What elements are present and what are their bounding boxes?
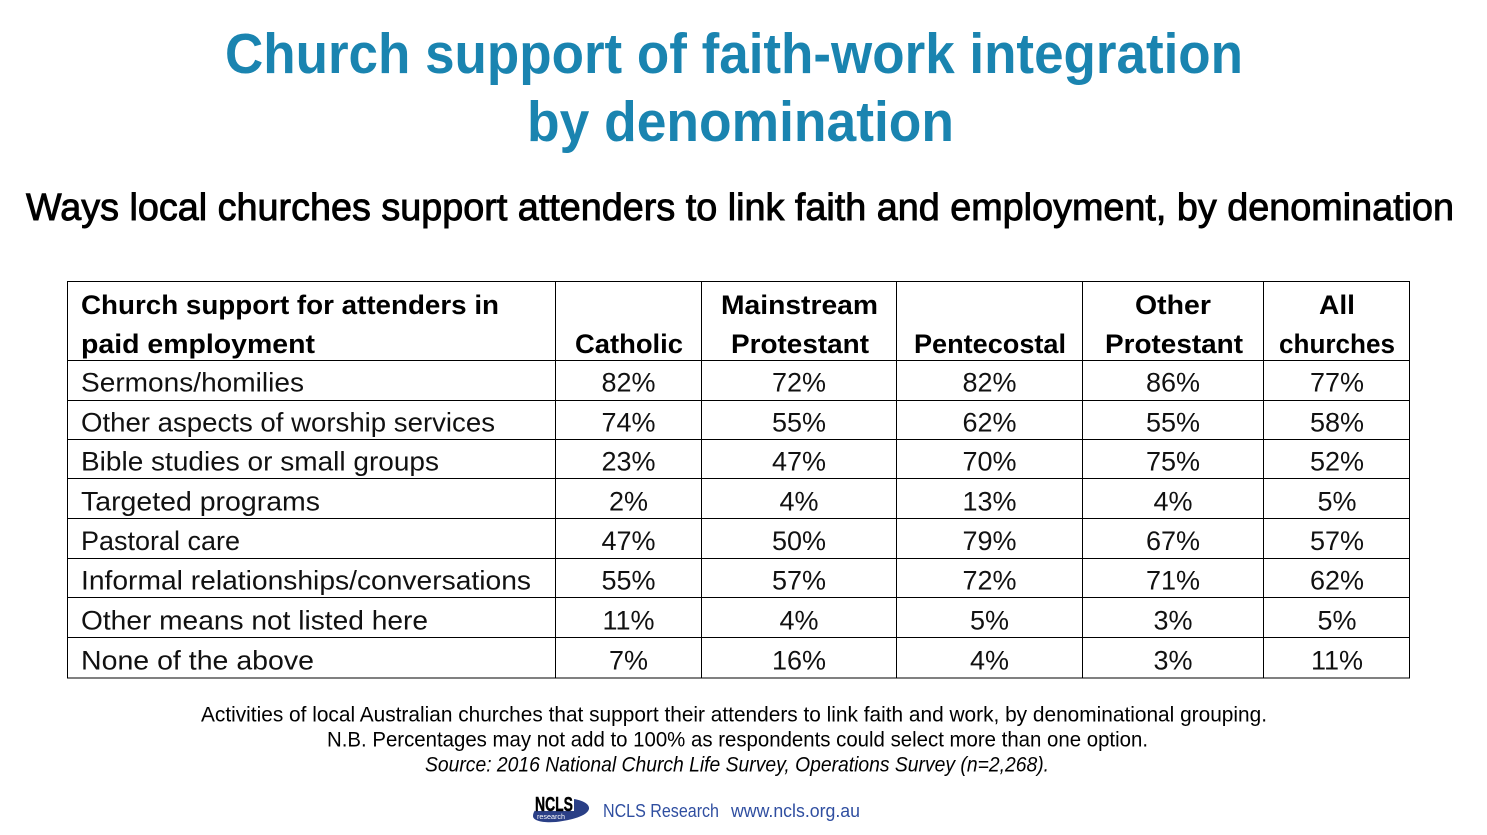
table header row: Church support for attenders in	[81, 290, 499, 320]
row: Informal relationships/conversations: 57%	[772, 566, 826, 596]
row: Sermons/homilies: 86%	[1146, 368, 1200, 398]
row: None of the above: 3%	[1153, 646, 1193, 676]
footer: organisation and website	[603, 801, 860, 821]
row: Targeted programs: Targeted programs	[81, 486, 320, 516]
row: Other aspects of worship services: 62%	[962, 408, 1017, 438]
table header row: Catholic	[575, 329, 683, 359]
row: Pastoral care: Pastoral care	[81, 526, 240, 556]
row: Other means not listed here: 4%	[779, 606, 819, 636]
row: Informal relationships/conversations: 71%	[1146, 566, 1200, 596]
row: Bible studies or small groups	[81, 446, 1364, 476]
table header row: paid employment	[81, 329, 315, 359]
row: Targeted programs: 13%	[962, 486, 1017, 516]
row: Other means not listed here: 5%	[1317, 606, 1357, 636]
row: Sermons/homilies	[81, 368, 1364, 398]
row: Bible studies or small groups: 23%	[601, 446, 656, 476]
row: Pastoral care: 50%	[772, 526, 826, 556]
row: Informal relationships/conversations: 55%	[601, 566, 656, 596]
title: Church support of faith-work integration	[225, 22, 1243, 86]
table header row: Protestant	[1105, 329, 1243, 359]
row: Sermons/homilies: 82%	[601, 368, 656, 398]
row: Targeted programs: 2%	[609, 486, 648, 516]
row: Informal relationships/conversations: Informal relationships/conversations	[81, 566, 531, 596]
row: Sermons/homilies: 77%	[1310, 368, 1364, 398]
title	[225, 22, 1243, 154]
table header row	[81, 290, 1395, 359]
table grid	[67, 281, 1410, 678]
row: Pastoral care: 67%	[1146, 526, 1200, 556]
row: Targeted programs: 4%	[1153, 486, 1193, 516]
row: Other aspects of worship services: 55%	[1146, 408, 1200, 438]
footnotes: Source: 2016 National Church Life Survey, Operations Survey (n=2,268).	[425, 754, 1049, 776]
row: Pastoral care: 57%	[1310, 526, 1364, 556]
footnotes	[201, 704, 1267, 776]
row: Other means not listed here: 3%	[1153, 606, 1193, 636]
row: Other aspects of worship services: 74%	[601, 408, 656, 438]
table header row: Other	[1135, 290, 1212, 320]
table header row: Pentecostal	[914, 329, 1066, 359]
row: Informal relationships/conversations	[81, 566, 1364, 596]
row: Bible studies or small groups: Bible studies or small groups	[81, 446, 439, 476]
row: None of the above: 11%	[1311, 646, 1363, 676]
row: Other means not listed here	[81, 606, 1357, 636]
row: Pastoral care: 79%	[962, 526, 1017, 556]
row: Sermons/homilies: 72%	[772, 368, 826, 398]
row: Targeted programs	[81, 486, 1357, 516]
row: Other means not listed here: 11%	[602, 606, 655, 636]
row: None of the above: 16%	[772, 646, 826, 676]
footnotes: Activities of local Australian churches that support their attenders to link faith and work, by denominational grouping.	[201, 704, 1267, 726]
row: Other means not listed here: 5%	[970, 606, 1009, 636]
row: Other means not listed here: Other means not listed here	[81, 606, 428, 636]
row: Other aspects of worship services: Other aspects of worship services	[81, 408, 495, 438]
table	[67, 281, 1410, 678]
row: Informal relationships/conversations: 62%	[1310, 566, 1364, 596]
row: Bible studies or small groups: 52%	[1310, 446, 1364, 476]
table header row: Mainstream	[721, 290, 878, 320]
row: Other aspects of worship services: 55%	[772, 408, 826, 438]
row: None of the above	[81, 646, 1363, 676]
footer: organisation and website: NCLS Research	[603, 801, 719, 821]
row: Other aspects of worship services: 58%	[1310, 408, 1364, 438]
table header row: All	[1319, 290, 1355, 320]
row: Bible studies or small groups: 75%	[1146, 446, 1200, 476]
row: Pastoral care	[81, 526, 1364, 556]
icon: NCLS logo: NCLS	[535, 794, 573, 816]
row: Informal relationships/conversations: 72%	[962, 566, 1017, 596]
row: Pastoral care: 47%	[601, 526, 656, 556]
footer: organisation and website: www.ncls.org.au	[730, 801, 860, 821]
row: Bible studies or small groups: 70%	[962, 446, 1017, 476]
table header row: churches	[1279, 329, 1395, 359]
row: None of the above: 7%	[609, 646, 648, 676]
row: Sermons/homilies: 82%	[962, 368, 1017, 398]
footnotes: N.B. Percentages may not add to 100% as respondents could select more than one option.	[327, 728, 1148, 752]
row: Targeted programs: 5%	[1317, 486, 1357, 516]
row: None of the above: 4%	[970, 646, 1009, 676]
row: Targeted programs: 4%	[779, 486, 819, 516]
row: Other aspects of worship services	[81, 408, 1364, 438]
row: Sermons/homilies: Sermons/homilies	[81, 368, 304, 398]
icon: NCLS logo: research	[537, 814, 565, 821]
row: Bible studies or small groups: 47%	[772, 446, 826, 476]
subtitle: Ways local churches support attenders to link faith and employment, by denomination	[26, 187, 1454, 229]
title: by denomination	[527, 90, 954, 154]
row: None of the above: None of the above	[81, 646, 314, 676]
table header row: Protestant	[731, 329, 869, 359]
